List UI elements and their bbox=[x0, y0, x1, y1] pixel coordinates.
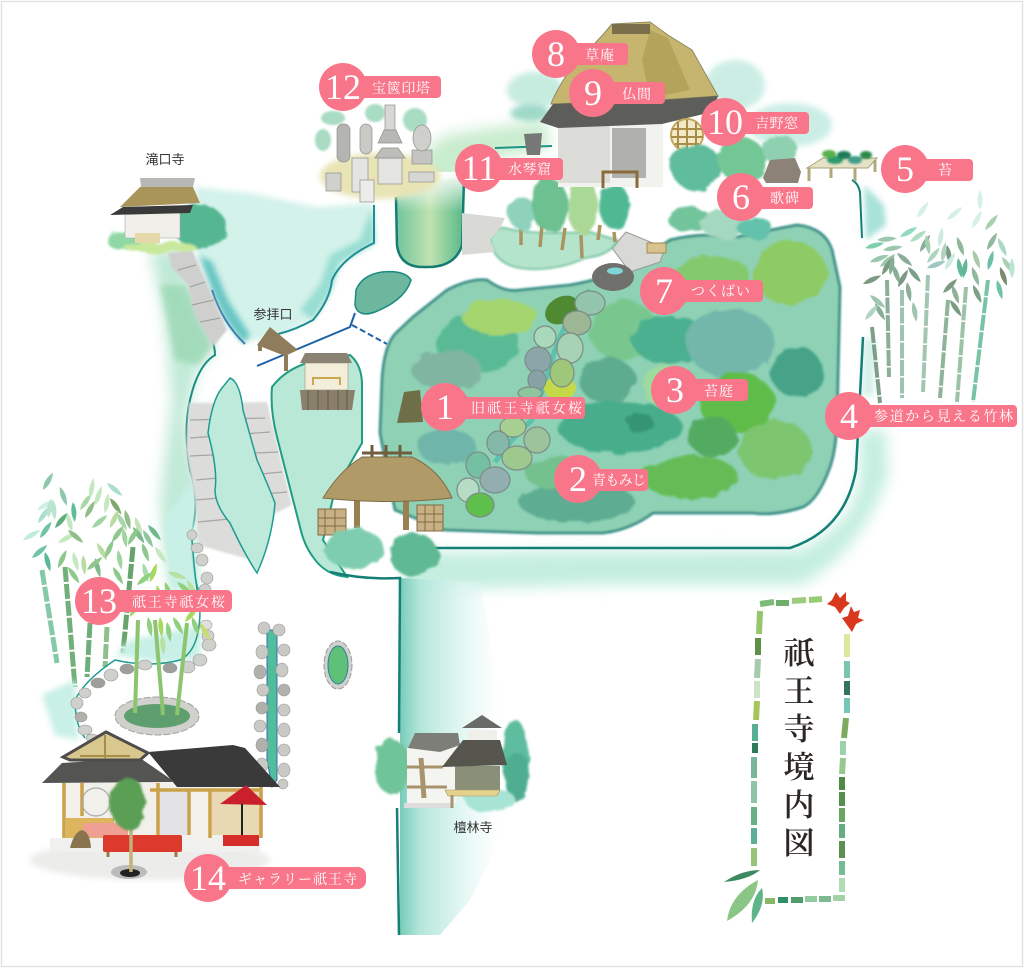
dark green bush bbox=[540, 290, 584, 330]
red bench bbox=[103, 835, 182, 852]
red umbrella bbox=[220, 785, 267, 805]
label 4: 参道から見える竹林 bbox=[874, 408, 1013, 425]
label 13: 13 bbox=[81, 581, 117, 621]
bucket bbox=[524, 133, 542, 155]
small oval pond bbox=[324, 641, 352, 689]
walls bbox=[62, 783, 263, 838]
bushes and song monument bbox=[668, 136, 801, 238]
icon: maple leaves bbox=[827, 592, 864, 632]
garden base bbox=[380, 225, 840, 533]
label 11: 11 bbox=[462, 148, 496, 188]
bamboo frame bbox=[754, 599, 847, 901]
label 8: 草庵 bbox=[585, 47, 614, 64]
central island bbox=[208, 378, 275, 573]
right and bottom wash bbox=[330, 180, 888, 935]
label 3: 苔庭 bbox=[704, 383, 733, 400]
title: 図 bbox=[784, 826, 814, 861]
label 14: 14 bbox=[190, 858, 226, 898]
label 9: 仏間 bbox=[622, 87, 651, 103]
stepping stones bbox=[457, 291, 605, 517]
ground bbox=[30, 840, 270, 880]
label 9: 9 bbox=[584, 73, 602, 113]
label 4 bbox=[825, 392, 1017, 440]
label 2 bbox=[554, 455, 648, 503]
label 2: 2 bbox=[569, 459, 587, 499]
tree island bbox=[490, 228, 617, 269]
courtyard tree bbox=[111, 865, 147, 879]
label 14 bbox=[184, 854, 366, 902]
label 13 bbox=[75, 577, 232, 625]
thatched hermitage bbox=[524, 22, 718, 188]
stone bridge bbox=[186, 402, 292, 560]
label 2: 青もみじ bbox=[592, 472, 646, 489]
label 4: 4 bbox=[840, 396, 858, 436]
mint wash behind hermitage bbox=[507, 60, 832, 147]
title: 境 bbox=[784, 750, 814, 785]
thatched gatehouse bbox=[318, 445, 452, 535]
Danrin-ji buildings bbox=[374, 715, 529, 812]
pond: bamboo pond wash and stones bbox=[42, 480, 216, 742]
label 8 bbox=[532, 30, 628, 78]
Gallery Giouji building bbox=[30, 732, 280, 880]
bushes at gatehouse bbox=[324, 529, 438, 577]
moss table bbox=[807, 150, 877, 181]
right bamboo grove bbox=[862, 190, 1016, 403]
label 6: 6 bbox=[732, 177, 750, 217]
trees by thatched hermitage bbox=[508, 175, 631, 258]
stone path upper bbox=[168, 250, 227, 347]
blue stream lines bbox=[257, 313, 387, 366]
label 9 bbox=[569, 69, 665, 117]
label 10: 10 bbox=[707, 102, 743, 142]
icon: bamboo leaves bbox=[724, 870, 763, 923]
label 12 bbox=[319, 63, 441, 111]
bamboo planter bbox=[115, 562, 212, 735]
label 11 bbox=[455, 144, 563, 192]
wall bbox=[558, 122, 663, 187]
label 1: 1 bbox=[436, 387, 454, 427]
left roof bbox=[42, 758, 175, 783]
yellow moss bbox=[544, 376, 576, 400]
water: left wash bbox=[150, 250, 215, 590]
left bamboo grove bbox=[22, 471, 169, 687]
moss patches bbox=[412, 241, 826, 522]
tree stump bbox=[397, 390, 423, 423]
pink seat bbox=[83, 823, 128, 837]
label 7: 7 bbox=[655, 271, 673, 311]
label 1 bbox=[421, 383, 585, 431]
label 3: 3 bbox=[666, 370, 684, 410]
label 13: 祇王寺祇女桜 bbox=[132, 594, 225, 611]
eaves bbox=[540, 96, 718, 128]
thatched roof bbox=[551, 22, 718, 104]
title frame and title bbox=[724, 592, 864, 923]
bench bbox=[603, 172, 637, 188]
right roof bbox=[148, 745, 280, 787]
label 7: つくばい bbox=[691, 284, 750, 300]
label 10 bbox=[701, 98, 809, 146]
narrow stream with stones bbox=[254, 622, 290, 789]
label 8: 8 bbox=[547, 34, 565, 74]
label 5: 5 bbox=[896, 149, 914, 189]
entrance gate bbox=[257, 327, 298, 371]
title: 王 bbox=[784, 674, 814, 709]
label 12: 12 bbox=[325, 67, 361, 107]
green pond island bbox=[355, 272, 411, 314]
place name: Danrin-ji: 檀林寺 bbox=[453, 820, 493, 835]
label 11: 水琴窟 bbox=[508, 161, 551, 178]
place name: Takiguchi-dera: 滝口寺 bbox=[145, 152, 185, 167]
label 6 bbox=[717, 173, 813, 221]
label 14: ギャラリー祇王寺 bbox=[238, 871, 357, 888]
small house with fence bbox=[300, 353, 355, 410]
round window bbox=[671, 119, 703, 151]
water: upper mint wash bbox=[195, 187, 375, 344]
moss garden bbox=[380, 225, 840, 533]
label 5 bbox=[881, 145, 973, 193]
U-shaped green island bbox=[392, 172, 468, 267]
icon: tsukubai water basin bbox=[592, 232, 666, 291]
water line near bucket bbox=[495, 146, 552, 148]
title: 祇 bbox=[784, 636, 814, 671]
upper green wash bbox=[400, 120, 550, 195]
label 1: 旧祇王寺祇女桜 bbox=[471, 400, 582, 417]
island with small house bbox=[272, 355, 362, 577]
label 10: 吉野窓 bbox=[755, 115, 799, 132]
monument stone bbox=[763, 158, 801, 183]
stream bbox=[495, 290, 590, 462]
title: 寺 bbox=[784, 712, 814, 747]
label 6: 歌碑 bbox=[770, 191, 799, 207]
stone pagodas bbox=[315, 104, 440, 202]
label 7 bbox=[640, 267, 763, 315]
place name: entrance: 参拝口 bbox=[253, 307, 293, 322]
gable bbox=[63, 732, 148, 760]
stone animal bbox=[70, 830, 91, 848]
label 3 bbox=[651, 366, 748, 414]
title: 内 bbox=[784, 788, 814, 823]
Takiguchi-dera building bbox=[107, 178, 226, 253]
label 12: 宝篋印塔 bbox=[372, 80, 430, 97]
label 5: 苔 bbox=[938, 162, 952, 179]
stone block bbox=[462, 213, 505, 255]
